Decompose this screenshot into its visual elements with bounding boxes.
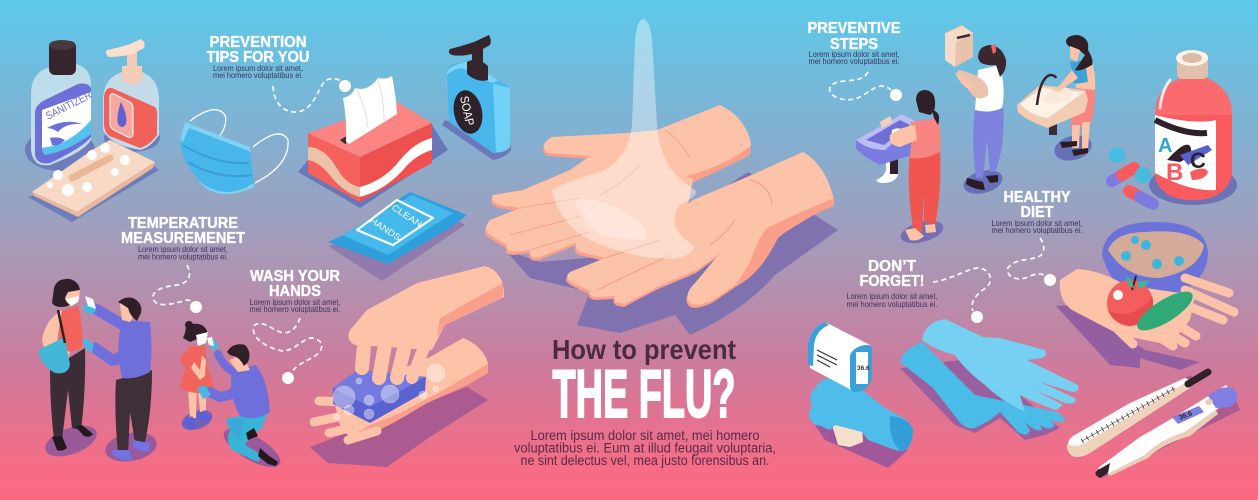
heading: temperature measurement: Lorem ipsum dolor sit amet,: [138, 245, 228, 254]
back hand: [485, 105, 751, 261]
heading: preventive steps: STEPS: [830, 36, 878, 53]
lower glove: [900, 342, 1066, 435]
front hand: [566, 152, 834, 308]
healthy food bowl on hand: [1056, 222, 1234, 370]
water stream: [552, 19, 696, 259]
heading: wash your hands: WASH YOUR: [250, 268, 340, 285]
hands washing with soap: [310, 266, 504, 467]
title: THE FLU?: [552, 356, 736, 432]
heading: prevention tips: [206, 34, 310, 80]
icon: pills: [1109, 147, 1153, 204]
woman at beige sink: [1017, 35, 1095, 165]
shadow: [310, 387, 488, 467]
title: [552, 334, 736, 432]
description text: voluptatibus ei. Eum at illud feugait voluptaria,: [514, 440, 776, 456]
dashed connector: wash hands: [253, 318, 322, 384]
heading: healthy diet: mei homero voluptatibus ei.: [992, 226, 1082, 235]
title: How to prevent: [552, 334, 736, 365]
bowl: [1102, 222, 1208, 300]
icon: vitamins bottle: B: [1166, 159, 1183, 186]
icon: hand dryer: [945, 25, 973, 67]
dashed connector: dont forget: [933, 268, 990, 323]
icon: infrared thermometer in glove: [808, 322, 913, 468]
heading: healthy diet: HEALTHY: [1004, 189, 1071, 206]
icon: vitamins bottle: [1149, 50, 1237, 205]
heading: preventive steps: Lorem ipsum dolor sit amet,: [808, 50, 900, 59]
icon: infrared thermometer in glove: 36.6: [857, 365, 870, 372]
heading: temperature measurement: [121, 215, 245, 262]
heading: dont forget: [846, 258, 938, 309]
heading: dont forget: DON’T: [868, 258, 916, 275]
heading: temperature measurement: MEASUREMENET: [121, 230, 245, 247]
description text: [514, 428, 776, 468]
upper hand: [348, 266, 504, 378]
woman having temperature measured: [38, 279, 101, 462]
hands shadow: [505, 172, 838, 335]
icon: clean hands wipes: HANDS: [368, 215, 403, 243]
icon: pump bottle: [103, 39, 160, 152]
heading: prevention tips: Lorem ipsum dolor sit amet,: [213, 64, 303, 73]
icon: soap dispenser: [442, 35, 511, 160]
dashed connector: preventive steps: [830, 72, 902, 101]
heading: temperature measurement: TEMPERATURE: [128, 215, 238, 232]
heading: wash your hands: HANDS: [269, 283, 321, 300]
icon: beige wet wipes pack: [28, 140, 159, 222]
heading: prevention tips: TIPS FOR YOU: [206, 49, 310, 66]
woman at hand dryer: [955, 44, 1006, 198]
heading: wash your hands: [250, 268, 340, 314]
heading: preventive steps: PREVENTIVE: [808, 20, 901, 37]
icon: digital thermometer: [1095, 385, 1240, 478]
icon: vitamins bottle: C: [1190, 148, 1206, 173]
heading: preventive steps: [808, 20, 901, 66]
heading: preventive steps: mei homero voluptatibus ei.: [808, 57, 900, 66]
icon: soap dispenser: SOAP: [457, 95, 477, 127]
soap bar: [333, 370, 426, 423]
icon: clean hands wipes: [328, 192, 467, 281]
upper glove: [922, 319, 1078, 412]
heading: dont forget: FORGET!: [860, 273, 924, 290]
heading: prevention tips: PREVENTION: [210, 34, 306, 51]
icon: digital thermometer: 36.6: [1178, 410, 1193, 422]
dashed connector: healthy diet: [1008, 238, 1056, 286]
woman at purple sink: [856, 90, 946, 247]
heading: wash your hands: Lorem ipsum dolor sit amet,: [250, 298, 340, 307]
child having temperature measured: [179, 321, 220, 434]
heading: temperature measurement: mei homero voluptatibus ei.: [138, 252, 228, 262]
heading: healthy diet: [992, 189, 1082, 235]
dashed connector: prevention tips: [273, 79, 351, 112]
bubbles: [333, 364, 445, 420]
lower hand: [314, 338, 488, 442]
heading: prevention tips: mei homero voluptatibus ei.: [213, 71, 303, 80]
icon: mercury thermometer: [1067, 372, 1208, 457]
description text: Lorem ipsum dolor sit amet, mei homero: [530, 428, 760, 443]
heading: wash your hands: mei homero voluptatibus ei.: [250, 305, 340, 314]
hand: [1060, 269, 1234, 346]
icon: sanitizer bottle: SANITIZER: [44, 89, 94, 123]
central hands with water: [485, 19, 838, 335]
icon: vitamins bottle: A: [1158, 135, 1172, 157]
heading: dont forget: Lorem ipsum dolor sit amet,: [846, 292, 938, 301]
man measuring temperature: [83, 296, 159, 465]
icon: sanitizer bottle: [25, 40, 95, 171]
icon: tissue box: [298, 76, 448, 208]
heading: dont forget: mei homero voluptatibus ei.: [846, 300, 938, 309]
heading: healthy diet: DIET: [1020, 204, 1054, 221]
icon: gloves: [900, 319, 1078, 440]
cucumber: [1132, 285, 1198, 337]
hand shadow: [1056, 305, 1200, 370]
icon: clean hands wipes: CLEAN: [390, 202, 424, 229]
apple: [1107, 276, 1153, 326]
description text: ne sint delectus vel, mea justo forensibus an.: [520, 453, 770, 468]
heading: healthy diet: Lorem ipsum dolor sit amet,: [992, 219, 1082, 228]
kneeling man measuring temperature: [197, 344, 286, 474]
icon: medical mask: [180, 110, 288, 194]
dashed connector: temperature: [153, 265, 202, 313]
